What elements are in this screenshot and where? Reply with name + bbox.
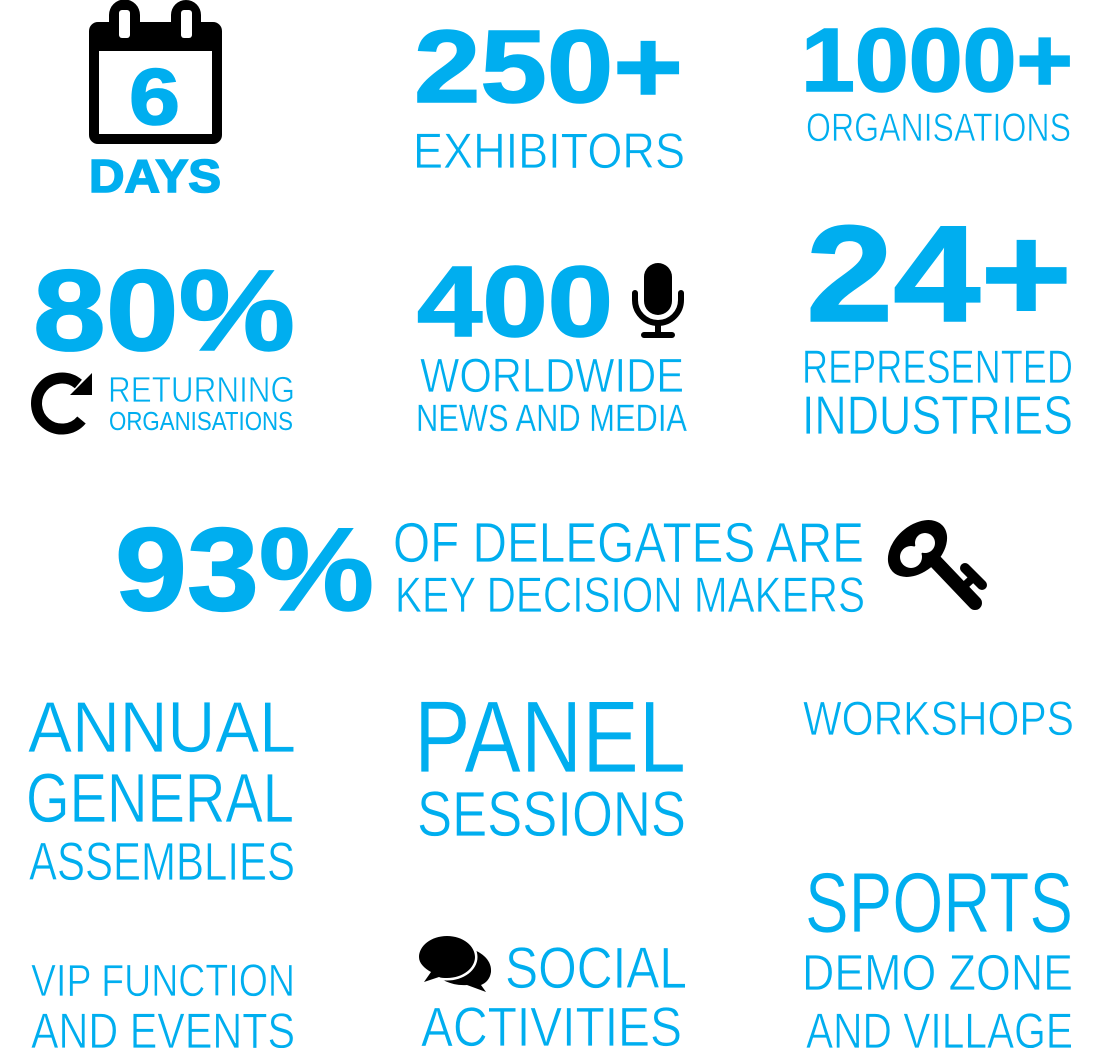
text: sports demo zone and village [802,856,1073,1048]
stat: 93% key decision makers: 93% [115,504,374,636]
icon: microphone [635,263,681,335]
label: days: DAYS [89,150,221,202]
stat: 24+ represented industries [802,198,1073,446]
number 6: 6 [129,52,180,141]
stat: 1000+ organisations: 1000+ [801,11,1073,111]
text: social activities [416,934,687,1048]
icon: key [877,509,982,603]
text: annual general assemblies: ANNUAL [28,688,296,768]
stat: 1000+ organisations [801,11,1073,150]
text: annual general assemblies [26,688,296,892]
stat: 93% key decision makers [115,504,982,636]
stat: 93% key decision makers: KEY DECISION MAKERS [395,567,865,623]
stat: 400 worldwide news and media: WORLDWIDE [420,350,684,403]
stat: 93% key decision makers: OF DELEGATES ARE [393,511,864,575]
text: vip function and events [31,955,295,1048]
stat: 250+ exhibitors: EXHIBITORS [413,123,685,179]
stat: 24+ represented industries: 24+ [806,198,1072,351]
text: panel sessions: SESSIONS [417,778,686,850]
stat: 80% returning organisations: RETURNING [108,369,295,410]
text: social activities: SOCIAL [505,936,687,1001]
stat: 80% returning organisations [33,247,295,436]
icon: refresh arrow [37,373,92,429]
text: annual general assemblies: GENERAL [26,759,294,837]
stat: 250+ exhibitors [413,9,685,179]
text: panel sessions: PANEL [414,680,686,794]
stat: 400 worldwide news and media: 400 [417,246,613,358]
text: panel sessions [414,680,686,850]
stat: 400 worldwide news and media [416,246,688,440]
stat: 80% returning organisations: ORGANISATIONS [109,406,293,436]
icon: speech bubbles [416,934,491,992]
stat: 6 days [89,0,222,202]
stat: 250+ exhibitors: 250+ [414,9,683,124]
stat: 400 worldwide news and media: NEWS AND MEDIA [416,398,688,440]
text: vip function and events: VIP FUNCTION [31,955,295,1006]
text: annual general assemblies: ASSEMBLIES [29,832,295,892]
icon: calendar [89,0,222,144]
stat: 80% returning organisations: 80% [33,247,295,375]
